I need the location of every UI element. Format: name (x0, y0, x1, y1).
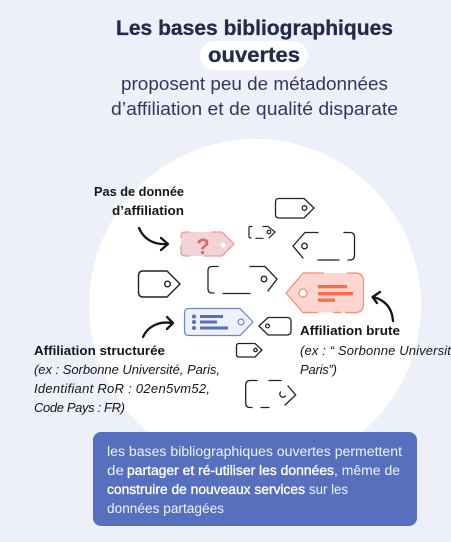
icon: red tag with question mark (181, 232, 234, 259)
callout box: les bases bibliographiques ouvertes permettent (107, 444, 402, 459)
label: structured affiliation: (ex : Sorbonne Université, Paris, (34, 362, 220, 377)
title: ouvertes (208, 44, 300, 67)
label: no affiliation data: d’affiliation (112, 203, 184, 218)
label: raw affiliation: Paris”) (300, 362, 337, 377)
subtitle (111, 74, 398, 119)
callout box (93, 432, 417, 526)
label: raw affiliation (300, 323, 451, 377)
arrow: to red tag (139, 228, 168, 250)
label: structured affiliation (34, 343, 220, 415)
title: Les bases bibliographiques (116, 17, 393, 40)
subtitle: d’affiliation et de qualité disparate (111, 99, 398, 119)
icon: small dashed tag (249, 226, 275, 238)
white background circle (89, 139, 421, 471)
icon: blue structured affiliation tag (184, 308, 253, 336)
label: structured affiliation: Identifiant RoR : 02en5vm52, (34, 381, 210, 396)
label: structured affiliation: Code Pays : FR) (34, 400, 125, 415)
icon: outline tag left-pointing (259, 318, 291, 335)
callout box: partager et ré-utiliser les données (127, 463, 334, 478)
subtitle: proposent peu de métadonnées (121, 74, 388, 94)
callout box: construire de nouveaux services (107, 482, 305, 497)
arrow: to salmon tag (372, 292, 393, 321)
icon: dashed tag left-pointing (293, 232, 354, 260)
callout box: sur les (309, 482, 348, 497)
icon: outline tag left (138, 271, 180, 297)
icon: outline tag top right (276, 198, 314, 218)
title (116, 17, 393, 70)
label: structured affiliation: Affiliation structurée (34, 343, 165, 358)
icon: dashed tag centre (208, 266, 277, 294)
callout box: de (107, 463, 124, 478)
icon: dashed tag bottom (246, 380, 296, 408)
label: no affiliation data: Pas de donnée (94, 184, 184, 199)
callout box: données partagées (107, 501, 224, 516)
label: raw affiliation: Affiliation brute (300, 323, 400, 338)
callout box: , même de (334, 463, 400, 478)
label: no affiliation data (94, 184, 184, 218)
icon: salmon raw affiliation tag (286, 273, 364, 312)
icon: small outline tag (236, 344, 262, 357)
arrow: to blue tag (143, 317, 173, 337)
icon: red tag with question mark: ? (196, 234, 210, 259)
